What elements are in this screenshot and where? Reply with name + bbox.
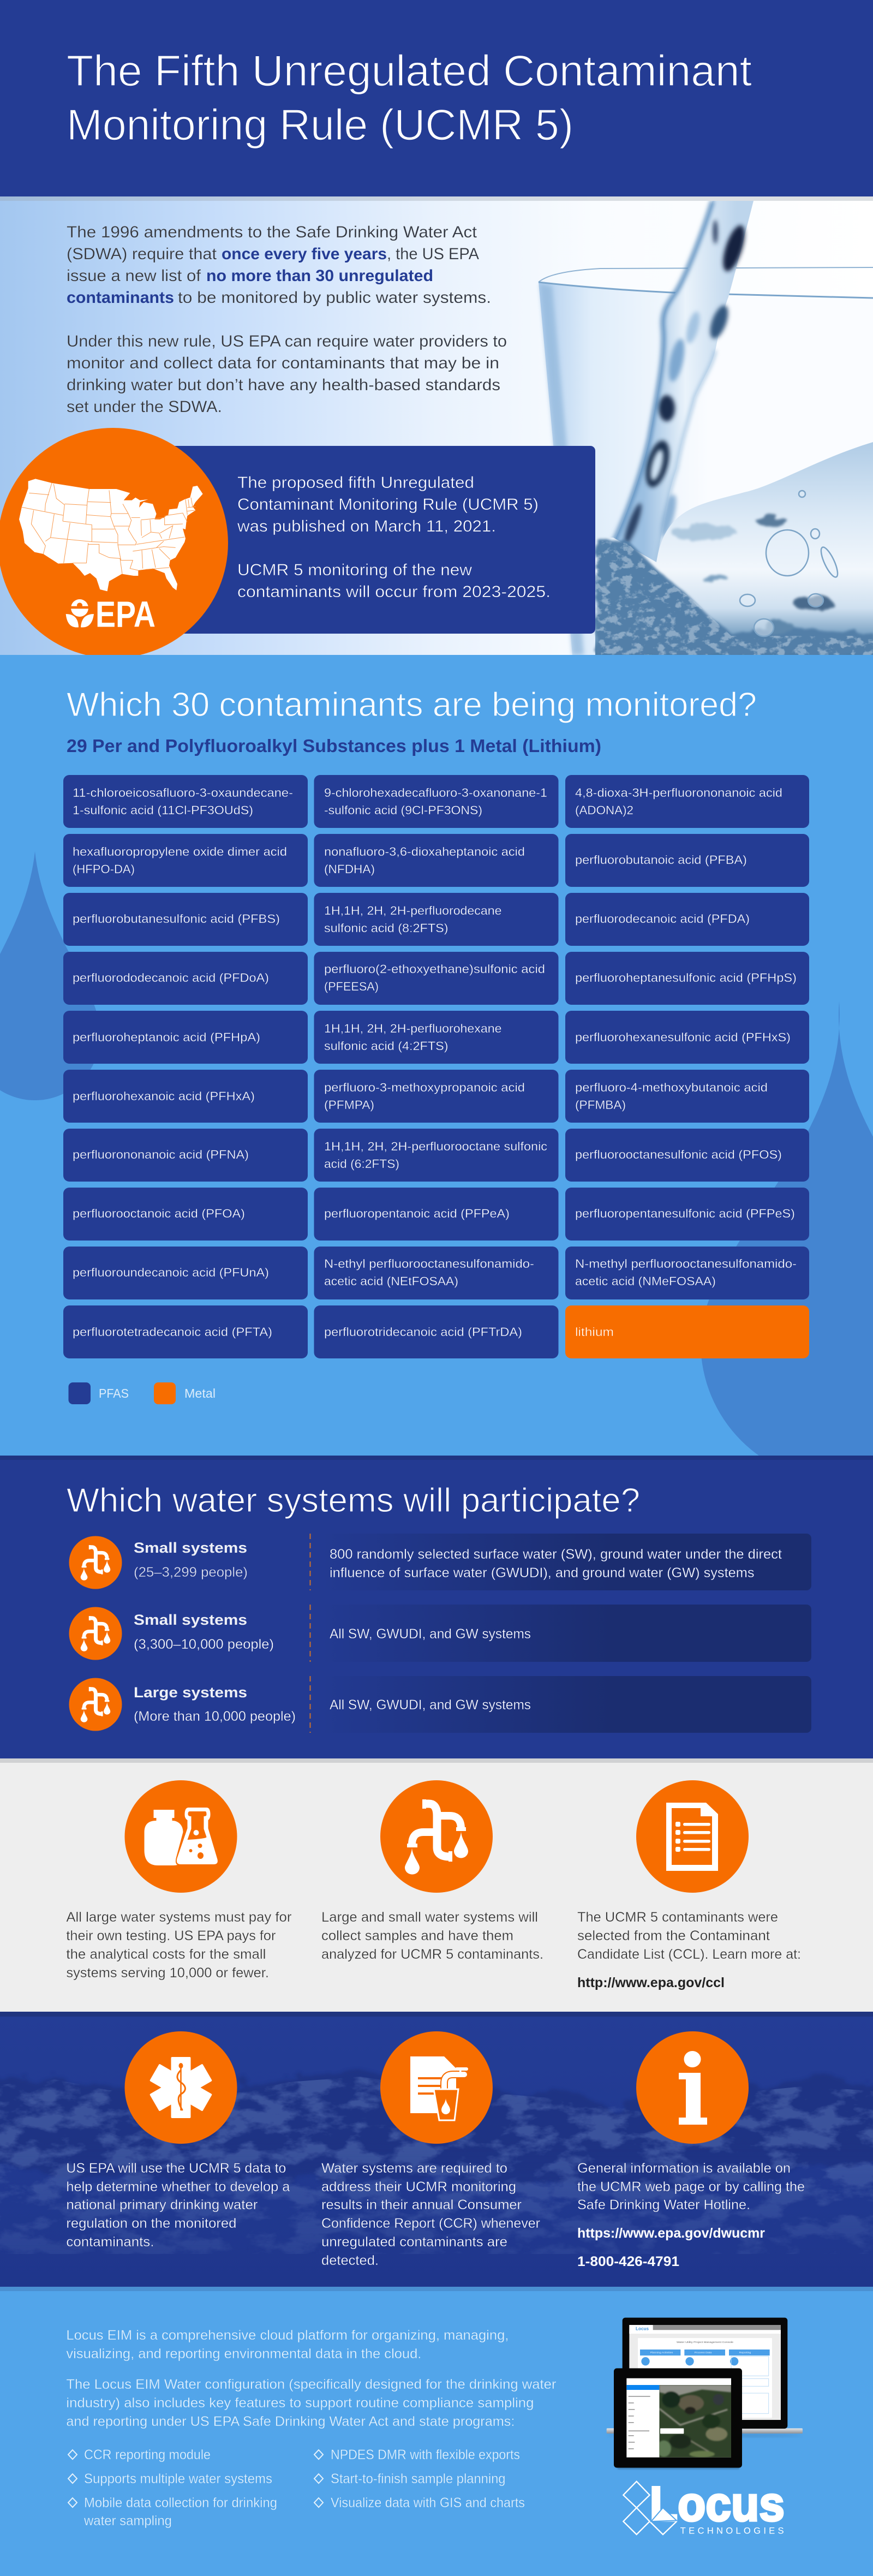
legend: PFAS [99, 1386, 129, 1400]
heading: Which 30 contaminants are being monitored? [67, 686, 757, 724]
logo: EPA emblem and wordmark [65, 599, 155, 628]
panel: participating water systems [0, 1456, 873, 1758]
fact: consumer confidence report: Water systems are required to [321, 2161, 507, 2176]
background: dark water texture [0, 2071, 873, 2254]
icon: document with list [666, 1803, 718, 1871]
contaminant card grid: (HFPO-DA) [73, 862, 135, 876]
contaminant card grid: perfluorobutanesulfonic acid (PFBS) [73, 912, 280, 926]
feature list: CCR reporting module [84, 2447, 211, 2462]
contaminant card grid: 1-sulfonic acid (11Cl-PF3OUdS) [73, 803, 253, 817]
contaminant card grid: 9-chlorohexadecafluoro-3-oxanonane-1 [324, 786, 547, 800]
fact: contaminant candidate list: selected from the Contaminant [577, 1928, 770, 1943]
contaminant card grid: perfluorononanoic acid (PFNA) [73, 1148, 249, 1161]
tablet [614, 2368, 742, 2470]
contaminant card grid: perfluorobutanoic acid (PFBA) [575, 853, 747, 867]
contaminant card grid: N-methyl perfluorooctanesulfonamido- [575, 1257, 797, 1271]
fact: use of data: national primary drinking water [66, 2197, 258, 2213]
panel: Locus EIM [0, 2287, 873, 2536]
contaminant card grid: sulfonic acid (4:2FTS) [324, 1039, 449, 1053]
row: small systems 25–3,299: Small systems [134, 1540, 247, 1556]
contaminant card grid: hexafluoropropylene oxide dimer acid [73, 845, 287, 858]
logo: Locus Technologies: TECHNOLOGIES [680, 2525, 784, 2536]
fact: contaminant candidate list: Candidate List (CCL). Learn more at: [577, 1947, 801, 1962]
contaminant card grid: perfluorooctanesulfonic acid (PFOS) [575, 1148, 782, 1161]
text block: rule background: (SDWA) require that [67, 245, 217, 263]
title [67, 46, 752, 149]
row: small systems 25–3,299: (25–3,299 people) [134, 1565, 248, 1580]
contaminant card grid: (PFMPA) [324, 1098, 374, 1112]
panel: use of data and information sources [0, 2012, 873, 2287]
fact: consumer confidence report [321, 2031, 540, 2268]
row: large systems: (More than 10,000 people) [134, 1709, 296, 1724]
feature list: water sampling [83, 2513, 172, 2529]
callout: publication and monitoring dates: was published on March 11, 2021. [237, 517, 496, 535]
contaminant card grid: (PFMBA) [575, 1098, 626, 1112]
fact: who pays: their own testing. US EPA pays for [66, 1928, 276, 1943]
fact: general information: General information is available on [577, 2161, 791, 2176]
fact: who pays: the analytical costs for the small [66, 1947, 266, 1962]
feature list [68, 2447, 525, 2529]
contaminant card grid: -sulfonic acid (9Cl-PF3ONS) [324, 803, 482, 817]
fact: use of data: regulation on the monitored [66, 2216, 236, 2231]
contaminant card grid: sulfonic acid (8:2FTS) [324, 921, 449, 935]
feature list: Supports multiple water systems [84, 2471, 272, 2486]
contaminant card grid: acetic acid (NMeFOSAA) [575, 1274, 716, 1288]
logo: EPA emblem and wordmark: EPA [95, 595, 156, 635]
row: small systems 3,300–10,000: All SW, GWUDI, and GW systems [330, 1626, 531, 1642]
icon: bottle and flask [144, 1808, 218, 1865]
text block: rule background: The 1996 amendments to the Safe Drinking Water Act [67, 223, 477, 241]
text block: platform description: and reporting under US EPA Safe Drinking Water Act and state programs: [66, 2414, 515, 2429]
contaminant card grid: N-ethyl perfluorooctanesulfonamido- [324, 1257, 534, 1271]
contaminant card grid: perfluorohexanesulfonic acid (PFHxS) [575, 1030, 791, 1044]
contaminant card grid: 11-chloroeicosafluoro-3-oxaundecane- [73, 786, 293, 800]
row: small systems 3,300–10,000: (3,300–10,000 people) [134, 1637, 274, 1652]
fact: general information: the UCMR web page or by calling the [577, 2179, 805, 2195]
header band [0, 0, 873, 196]
text block: platform description [66, 2328, 556, 2429]
feature list: NPDES DMR with flexible exports [331, 2447, 520, 2462]
contaminant card grid: perfluoro-3-methoxypropanoic acid [324, 1081, 525, 1094]
text block: platform description: industry) also includes key features to support routine compliance sampling [66, 2395, 534, 2411]
contaminant card grid: 1H,1H, 2H, 2H-perfluorodecane [324, 904, 502, 917]
contaminant card grid: perfluoropentanesulfonic acid (PFPeS) [575, 1207, 795, 1220]
contaminant card grid: perfluoroundecanoic acid (PFUnA) [73, 1266, 269, 1279]
text block: rule background: monitor and collect data for contaminants that may be in [67, 354, 499, 372]
fact: who pays: systems serving 10,000 or fewer. [66, 1965, 269, 1981]
fact: who pays [66, 1780, 291, 1981]
callout: publication and monitoring dates: The proposed fifth Unregulated [237, 474, 474, 492]
row: large systems [69, 1676, 811, 1733]
text block: rule background: , the US EPA [387, 245, 479, 263]
logo: Locus Technologies: Locus [650, 2476, 785, 2531]
contaminant card grid: acid (6:2FTS) [324, 1157, 399, 1171]
fact: use of data: contaminants. [66, 2234, 154, 2250]
text block: rule background: once every five years [222, 245, 387, 263]
text block: rule background: Under this new rule, US EPA can require water providers to [67, 332, 507, 350]
contaminant card grid [63, 775, 809, 1358]
fact: consumer confidence report: unregulated contaminants are [321, 2234, 507, 2250]
decorative water drops [0, 851, 873, 1481]
title: The Fifth Unregulated Contaminant [67, 46, 752, 95]
feature list: Mobile data collection for drinking [84, 2495, 277, 2511]
row: small systems 3,300–10,000: Small systems [134, 1612, 247, 1628]
fact: sample collection: Large and small water systems will [321, 1910, 538, 1925]
contaminant card grid: nonafluoro-3,6-dioxaheptanoic acid [324, 845, 525, 858]
badge: US map and EPA logo [0, 428, 228, 658]
feature list: Visualize data with GIS and charts [331, 2495, 525, 2511]
contaminant card grid: perfluorodecanoic acid (PFDA) [575, 912, 750, 926]
icon: star of life [150, 2057, 212, 2118]
callout: publication and monitoring dates: Contaminant Monitoring Rule (UCMR 5) [237, 496, 539, 514]
icon: information letter i [679, 2051, 707, 2125]
laptop: Water Utility Project Management Console [677, 2341, 733, 2344]
contaminant card grid: perfluoro-4-methoxybutanoic acid [575, 1081, 768, 1094]
contaminant card grid: perfluoro(2-ethoxyethane)sulfonic acid [324, 962, 545, 976]
contaminant card grid: perfluoroheptanoic acid (PFHpA) [73, 1030, 260, 1044]
text block: rule background [67, 223, 507, 416]
subheading: 29 Per and Polyfluoroalkyl Substances plus 1 Metal (Lithium) [67, 736, 601, 756]
laptop: Locus [636, 2325, 649, 2331]
contaminant card grid: acetic acid (NEtFOSAA) [324, 1274, 458, 1288]
panel: introduction with water photo [0, 196, 873, 658]
contaminant card grid: perfluorotetradecanoic acid (PFTA) [73, 1325, 272, 1339]
fact: use of data [66, 2031, 290, 2250]
fact: contaminant candidate list: http://www.epa.gov/ccl [577, 1975, 725, 1990]
contaminant card grid: perfluorododecanoic acid (PFDoA) [73, 971, 269, 985]
contaminant card grid: 1H,1H, 2H, 2H-perfluorohexane [324, 1022, 502, 1035]
row: small systems 25–3,299 [69, 1534, 811, 1590]
contaminant card grid: (ADONA)2 [575, 803, 633, 817]
fact: sample collection [321, 1780, 543, 1962]
icon: map of the contiguous United States [19, 479, 203, 635]
fact: consumer confidence report: detected. [321, 2253, 379, 2268]
heading: Which water systems will participate? [67, 1482, 640, 1519]
legend: Metal [184, 1386, 216, 1400]
illustration: laptop and tablet showing Locus EIM [607, 2318, 803, 2470]
legend [69, 1382, 216, 1404]
text block: rule background: set under the SDWA. [67, 398, 222, 416]
row: small systems 25–3,299: 800 randomly selected surface water (SW), ground water under the direct [330, 1547, 782, 1562]
text block: platform description: The Locus EIM Water configuration (specifically designed for the drinking water [66, 2377, 556, 2392]
fact: who pays: All large water systems must pay for [66, 1910, 291, 1925]
callout: publication and monitoring dates: contaminants will occur from 2023-2025. [237, 583, 551, 601]
panel: testing, sampling and selection facts [0, 1758, 873, 2012]
contaminant card grid: (NFDHA) [324, 862, 375, 876]
fact: general information: https://www.epa.gov/dwucmr [577, 2226, 765, 2241]
text block: platform description: visualizing, and reporting environmental data in the cloud. [66, 2346, 421, 2362]
fact: general information [577, 2031, 805, 2269]
row: large systems: Large systems [134, 1684, 247, 1701]
laptop: Reporting [739, 2351, 751, 2354]
text block: rule background: to be monitored by public water systems. [178, 289, 491, 307]
contaminant card grid: 4,8-dioxa-3H-perfluorononanoic acid [575, 786, 782, 800]
fact: consumer confidence report: results in their annual Consumer [321, 2197, 522, 2213]
text block: platform description: Locus EIM is a comprehensive cloud platform for organizing, managing, [66, 2328, 509, 2343]
title: Monitoring Rule (UCMR 5) [67, 100, 573, 149]
contaminant card grid: perfluorotridecanoic acid (PFTrDA) [324, 1325, 522, 1339]
laptop [607, 2318, 803, 2437]
laptop: Planning Activities [650, 2351, 673, 2354]
row: small systems 3,300–10,000 [69, 1605, 811, 1662]
fact: general information: 1-800-426-4791 [577, 2254, 679, 2269]
text block: rule background: drinking water but don’t have any health-based standards [67, 376, 500, 394]
callout: publication and monitoring dates [175, 446, 595, 634]
laptop: Process Data [695, 2351, 712, 2354]
fact: general information: Safe Drinking Water Hotline. [577, 2197, 750, 2213]
illustration: water pouring into a glass [539, 201, 873, 655]
fact: use of data: help determine whether to develop a [66, 2179, 290, 2195]
callout: publication and monitoring dates: UCMR 5 monitoring of the new [237, 561, 472, 579]
feature list: Start-to-finish sample planning [331, 2471, 505, 2486]
contaminant card grid: perfluorohexanoic acid (PFHxA) [73, 1089, 255, 1103]
fact: contaminant candidate list [577, 1780, 801, 1990]
contaminant card grid: lithium [575, 1325, 614, 1339]
contaminant card grid: perfluorooctanoic acid (PFOA) [73, 1207, 245, 1220]
fact: consumer confidence report: Confidence Report (CCR) whenever [321, 2216, 540, 2231]
contaminant card grid: perfluoropentanoic acid (PFPeA) [324, 1207, 510, 1220]
text block: rule background: contaminants [67, 289, 174, 307]
text block: rule background: issue a new list of [67, 267, 201, 285]
fact: sample collection: collect samples and have them [321, 1928, 513, 1943]
text block: rule background: no more than 30 unregulated [206, 267, 433, 285]
fact: consumer confidence report: address their UCMR monitoring [321, 2179, 516, 2195]
contaminant card grid: perfluoroheptanesulfonic acid (PFHpS) [575, 971, 797, 985]
panel: contaminants [0, 655, 873, 1481]
fact: sample collection: analyzed for UCMR 5 contaminants. [321, 1947, 543, 1962]
icon: document, faucet and glass [410, 2056, 468, 2120]
contaminant card grid: 1H,1H, 2H, 2H-perfluorooctane sulfonic [324, 1140, 547, 1153]
fact: use of data: US EPA will use the UCMR 5 data to [66, 2161, 286, 2176]
row: large systems: All SW, GWUDI, and GW systems [330, 1697, 531, 1713]
fact: contaminant candidate list: The UCMR 5 contaminants were [577, 1910, 778, 1925]
contaminant card grid: (PFEESA) [324, 980, 379, 993]
row: small systems 25–3,299: influence of surface water (GWUDI), and ground water (GW) systems [330, 1565, 754, 1581]
